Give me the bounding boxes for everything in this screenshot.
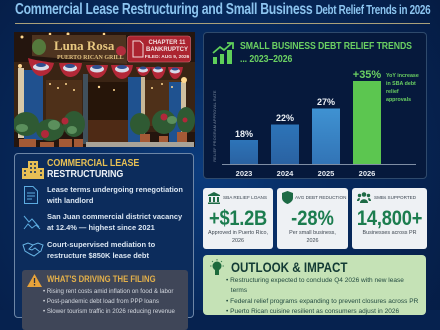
bar 2024: 2024 — [277, 169, 294, 178]
outlook bullets: • Federal relief programs expanding to prevent closures across PR — [226, 298, 418, 305]
wood sign — [32, 35, 127, 64]
stat card: SMBs supported: 14,800+ — [357, 207, 422, 230]
icon: falling chart — [24, 216, 40, 230]
callout bullets: • Post-pandemic debt load from PPP loans — [43, 298, 159, 305]
panel: outlook and impact — [203, 255, 426, 315]
stat card: SBA relief loans: 2026 — [232, 238, 244, 244]
icon: shield — [282, 191, 293, 204]
stat card: average debt reduction: AVG DEBT REDUCTION — [295, 195, 346, 200]
title: Commercial Lease Restructuring and Small Business Debt Relief Trends in 2026 — [15, 1, 430, 18]
bar 2025: 27% — [317, 97, 335, 107]
bar 2023 — [230, 129, 258, 178]
stat card: average debt reduction: -28% — [291, 207, 334, 230]
callout: what's driving the filing — [22, 270, 188, 330]
heading: OUTLOOK & IMPACT — [230, 260, 347, 275]
text: lease terms: Lease terms undergoing renegotiation — [47, 185, 183, 194]
icon: handshake — [22, 242, 44, 257]
text: mediation: Court-supervised mediation to — [47, 240, 155, 249]
text: vacancy: at 12.4% — highest since 2021 — [47, 222, 155, 232]
stat card: average debt reduction — [277, 188, 348, 249]
wood sign: Luna Rosa — [54, 38, 115, 53]
callout bullets — [43, 288, 175, 315]
icon: buildings — [22, 161, 44, 179]
stat card: average debt reduction: 2026 — [306, 238, 318, 244]
outlook bullets: • Puerto Rican cuisine resilient as consumers adjust in 2026 — [226, 308, 399, 315]
text: vacancy: San Juan commercial district vacancy — [47, 212, 182, 221]
annotation: relief — [386, 89, 399, 95]
icon: lightbulb — [210, 259, 224, 275]
stat card: SBA relief loans: +$1.2B — [209, 207, 267, 230]
annotation: YoY increase — [386, 73, 419, 79]
icon: bank — [208, 192, 220, 204]
bar 2023: 2023 — [236, 169, 252, 178]
chart heading: SMALL BUSINESS DEBT RELIEF TRENDS — [240, 40, 412, 52]
outlook bullets — [226, 277, 418, 315]
annotation: approvals — [386, 97, 411, 103]
panel: debt relief chart — [203, 32, 427, 179]
icon: growth chart — [212, 42, 234, 64]
bar chart — [213, 69, 419, 178]
badge: chapter 11 — [128, 36, 190, 62]
panel: commercial lease restructuring — [14, 153, 194, 318]
stat card: SBA relief loans: Approved in Puerto Rico, — [208, 230, 268, 236]
bunting — [28, 58, 183, 79]
heading: RESTRUCTURING — [47, 168, 123, 180]
bar 2026: 2026 — [359, 169, 375, 178]
icon: document — [24, 186, 38, 204]
callout bullets: • Slower tourism traffic in 2026 reducing revenue — [43, 308, 175, 315]
chart heading: ... 2023–2026 — [240, 53, 292, 65]
outlook bullets: terms — [231, 287, 247, 294]
annotation — [386, 73, 419, 103]
text: mediation: restructure $850K lease debt — [47, 250, 149, 260]
stat card: SBA relief loans: SBA RELIEF LOANS — [223, 195, 267, 200]
axis — [222, 164, 416, 165]
text: mediation — [47, 240, 155, 260]
bar 2026: +35% — [353, 69, 381, 81]
wood sign: PUERTO RICAN GRILL — [57, 55, 124, 61]
chart heading — [240, 40, 412, 65]
stat card: SMBs supported — [352, 188, 427, 249]
bar 2024: 22% — [276, 113, 294, 123]
y-axis label: RELIEF PROGRAM APPROVAL RATE — [213, 90, 217, 162]
text: lease terms — [47, 185, 183, 204]
callout bullets: • Rising rent costs amid inflation on food & labor — [43, 288, 173, 295]
heading — [47, 156, 139, 180]
badge: chapter 11: FILED: AUG 9, 2026 — [145, 54, 190, 60]
callout heading: WHAT'S DRIVING THE FILING — [47, 274, 156, 285]
bar 2023: 18% — [235, 129, 253, 139]
bar 2026 — [353, 69, 381, 178]
bar 2025: 2025 — [318, 169, 334, 178]
bar 2024 — [271, 113, 299, 178]
bar 2025 — [312, 97, 340, 178]
stat card: average debt reduction: Per small business, — [289, 230, 336, 236]
heading: COMMERCIAL LEASE — [47, 156, 139, 168]
text: vacancy — [47, 212, 182, 232]
text: lease terms: with landlord — [47, 196, 93, 204]
badge: chapter 11: BANKRUPTCY — [146, 47, 188, 53]
plants — [13, 107, 195, 141]
stat card: SMBs supported: SMBs SUPPORTED — [374, 195, 416, 200]
annotation: in SBA debt — [386, 81, 416, 87]
stat card: SMBs supported: Businesses across PR — [363, 230, 416, 236]
stat card: SBA relief loans — [203, 188, 273, 249]
badge: chapter 11: CHAPTER 11 — [148, 40, 186, 46]
outlook bullets: • Restructuring expected to conclude Q4 2026 with new lease — [226, 277, 404, 284]
icon: people — [357, 192, 371, 203]
photo: restaurant storefront — [14, 32, 195, 147]
icon: warning — [27, 274, 42, 287]
